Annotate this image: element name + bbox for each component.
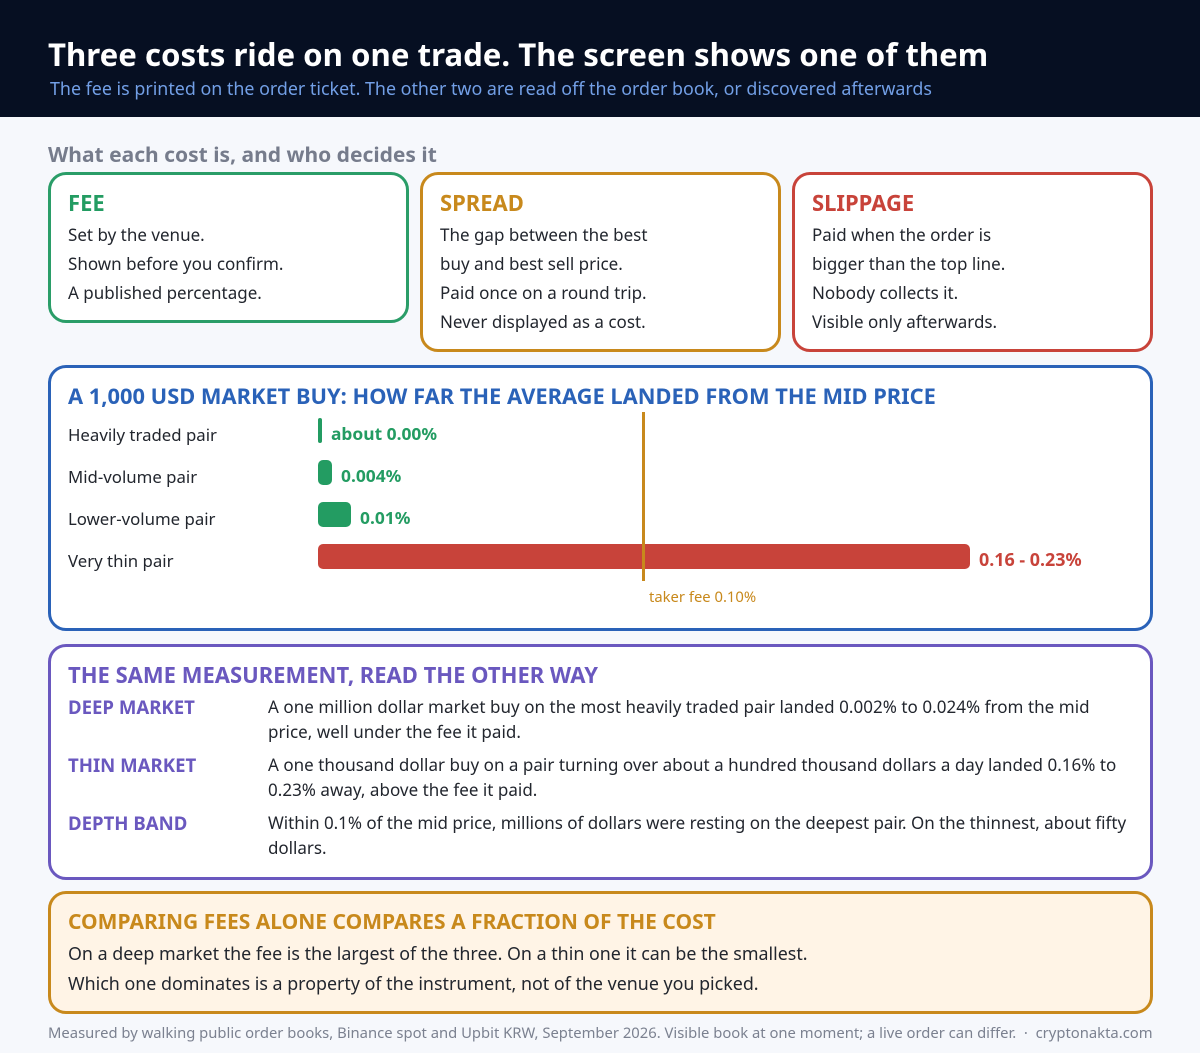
fee text: Shown before you confirm. (68, 252, 283, 275)
label: thin market: THIN MARKET (68, 753, 196, 778)
spread text: buy and best sell price. (440, 252, 623, 275)
row label: mid-volume: Mid-volume pair (68, 465, 197, 488)
text: thin market: 0.23% away, above the fee it paid. (268, 778, 537, 801)
fee text: Set by the venue. (68, 223, 205, 246)
taker fee marker line (642, 412, 645, 581)
bar: heavily traded (318, 418, 322, 443)
text: deep market: A one million dollar market buy on the most heavily traded pair landed 0.002% to 0.024% from the mid (268, 695, 1090, 718)
panel: spread (420, 172, 781, 352)
row label: very thin: Very thin pair (68, 549, 174, 572)
spread text: The gap between the best (440, 223, 647, 246)
bar: mid-volume (318, 460, 332, 485)
value: very thin: 0.16 - 0.23% (979, 548, 1082, 572)
subtitle: The fee is printed on the order ticket. The other two are read off the order book, or discovered afterwards (50, 77, 932, 101)
header band (0, 0, 1200, 117)
label: depth band: DEPTH BAND (68, 811, 187, 836)
label: deep market: DEEP MARKET (68, 695, 195, 720)
slippage text: Visible only afterwards. (812, 310, 997, 333)
section heading: What each cost is, and who decides it (48, 141, 437, 169)
spread text (440, 223, 648, 333)
slippage text: bigger than the top line. (812, 252, 1005, 275)
conclusion heading: COMPARING FEES ALONE COMPARES A FRACTION OF THE COST (68, 908, 716, 936)
spread text: Paid once on a round trip. (440, 281, 647, 304)
text: thin market (268, 753, 1116, 801)
slippage heading: SLIPPAGE (812, 188, 914, 218)
text: depth band (268, 811, 1126, 859)
conclusion text (68, 942, 808, 996)
bar: very thin (318, 544, 970, 569)
text: deep market (268, 695, 1090, 743)
conclusion text: On a deep market the fee is the largest of the three. On a thin one it can be the smallest. (68, 942, 808, 966)
row label: lower-volume: Lower-volume pair (68, 507, 216, 530)
taker fee label: taker fee 0.10% (649, 587, 756, 607)
slippage text: Nobody collects it. (812, 281, 958, 304)
footer source note: Measured by walking public order books, Binance spot and Upbit KRW, September 2026. Visible book at one moment; a live order can differ. · cryptonakta.com (48, 1023, 1153, 1043)
panel: bar chart (48, 365, 1153, 631)
text: deep market: price, well under the fee it paid. (268, 720, 521, 743)
spread heading: SPREAD (440, 188, 524, 218)
fee heading: FEE (68, 188, 105, 218)
panel: fee (48, 172, 409, 323)
value: heavily traded: about 0.00% (331, 422, 437, 446)
same measurement heading: THE SAME MEASUREMENT, READ THE OTHER WAY (68, 660, 598, 690)
value: mid-volume: 0.004% (341, 464, 401, 488)
text: depth band: Within 0.1% of the mid price, millions of dollars were resting on the deepest pair. On the thinnest, about fifty (268, 811, 1126, 834)
fee text: A published percentage. (68, 281, 262, 304)
spread text: Never displayed as a cost. (440, 310, 646, 333)
panel: conclusion callout (48, 891, 1153, 1014)
title: Three costs ride on one trade. The screen shows one of them (48, 34, 988, 76)
fee text (68, 223, 283, 304)
text: depth band: dollars. (268, 836, 327, 859)
row label: heavily traded: Heavily traded pair (68, 423, 217, 446)
chart heading: A 1,000 USD MARKET BUY: HOW FAR THE AVERAGE LANDED FROM THE MID PRICE (68, 382, 936, 411)
text: thin market: A one thousand dollar buy on a pair turning over about a hundred thousand dollars a day landed 0.16% to (268, 753, 1116, 776)
bar: lower-volume (318, 502, 351, 527)
slippage text: Paid when the order is (812, 223, 991, 246)
panel: slippage (792, 172, 1153, 352)
slippage text (812, 223, 1005, 333)
value: lower-volume: 0.01% (360, 506, 410, 530)
conclusion text: Which one dominates is a property of the instrument, not of the venue you picked. (68, 972, 759, 996)
panel: same measurement (48, 644, 1153, 880)
